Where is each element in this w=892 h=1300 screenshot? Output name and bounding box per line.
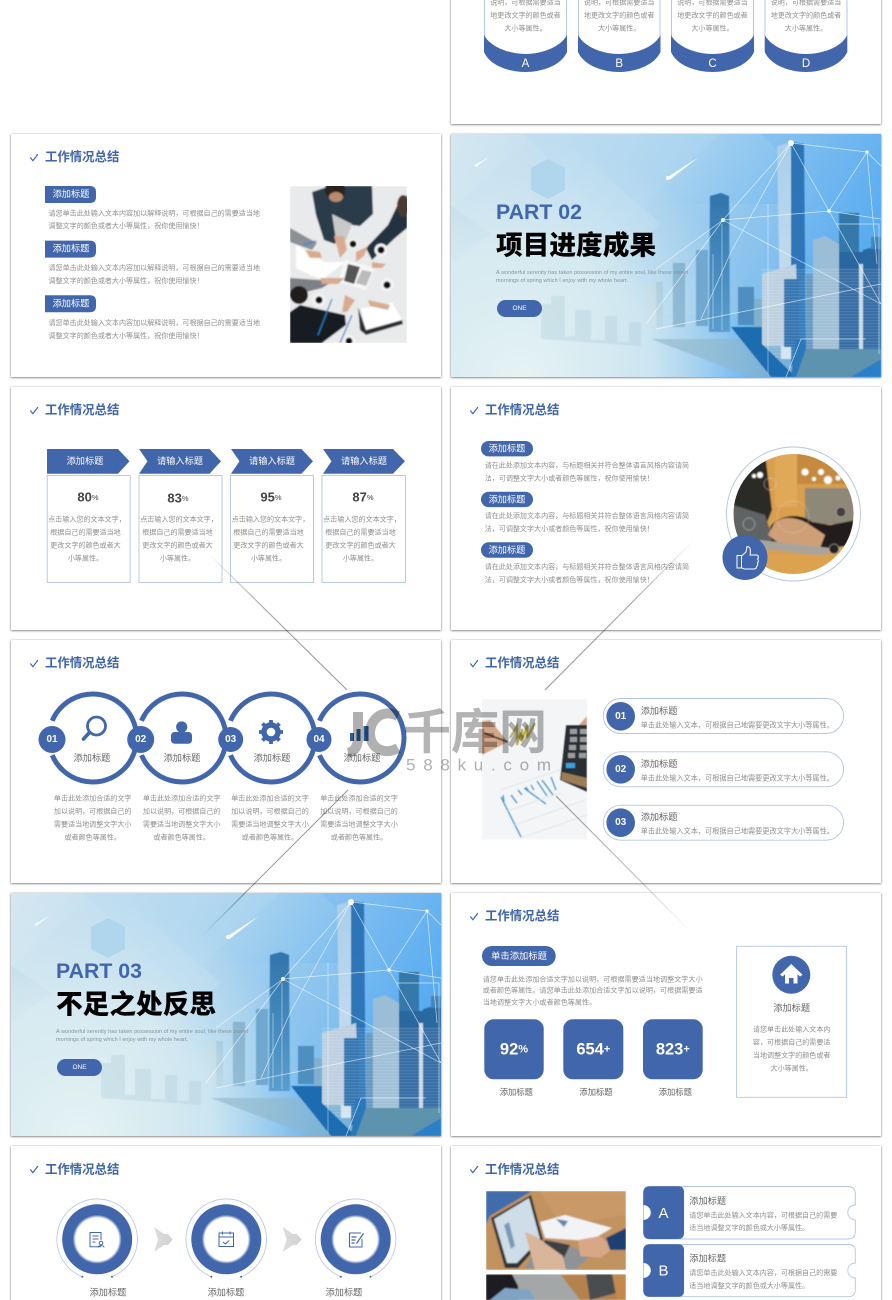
icon: thumbs up badge: [722, 535, 768, 580]
ring 2: 需要适当地调整文字大小: [143, 820, 220, 828]
photo: charts and calculator: [482, 699, 587, 840]
stat card 823+: 添加标题: [659, 1087, 692, 1097]
paragraph 3: 调整文字的颜色或者大小等属性，祝你使用愉快！: [48, 331, 204, 340]
side card: [737, 946, 847, 1097]
stat card 654+: [563, 1019, 623, 1097]
photo: second desk scene: [486, 1274, 626, 1300]
card B: B: [658, 1262, 669, 1280]
pill 3: [481, 542, 533, 558]
ring 3: 或者颜色等属性。: [242, 832, 298, 842]
column 1: [47, 449, 130, 582]
button: ONE: [72, 1064, 87, 1071]
numbered pill 1: 单击此处输入文本，可根据自己地需要更改文字大小等属性。: [641, 720, 834, 729]
pill heading: [482, 946, 556, 966]
column 3: 请输入标题: [249, 455, 295, 466]
subtitle: [496, 270, 688, 284]
pill heading: 单击添加标题: [491, 950, 547, 961]
cylinder B: [578, 0, 660, 72]
subtitle: A wonderful serenity has taken possession of my entire soul, like these sweet: [56, 1029, 248, 1035]
stat card 654+: 添加标题: [579, 1087, 613, 1097]
cylinder C: C: [708, 58, 717, 70]
pill 1: 添加标题: [489, 443, 525, 454]
pill 1: [481, 441, 533, 456]
photo: laptop and papers on wood desk: [486, 1191, 626, 1270]
cylinder A: 地更改文字的颜色或者: [490, 10, 561, 20]
card B: 添加标题: [689, 1253, 726, 1264]
numbered pill 3: 添加标题: [641, 811, 677, 822]
cylinder D: [765, 0, 847, 72]
panel: photo with three numbered pills: [451, 640, 881, 883]
paragraph 1: [485, 460, 689, 482]
stat card 92%: 添加标题: [500, 1087, 533, 1097]
paragraph 2: [485, 511, 689, 533]
step 2: [186, 1199, 267, 1297]
icon: note with pen: [350, 1233, 364, 1247]
panel: three tagged paragraphs with meeting photo: [11, 134, 441, 377]
column 2: 83%: [167, 490, 189, 506]
stat card 92%: [484, 1019, 544, 1097]
icon: calendar: [219, 1232, 234, 1246]
column 2: 点击输入您的文本文字，: [140, 514, 218, 524]
ring 1: 需要适当地调整文字大小: [54, 820, 131, 828]
cylinder B: 地更改文字的颜色或者: [584, 10, 654, 20]
ring 2: 02: [135, 734, 147, 745]
ring 4: 单击此处添加合适的文字: [320, 794, 398, 802]
heading: 工作情况总结: [485, 908, 559, 923]
subtitle: A wonderful serenity has taken possession of my entire soul, like these sweet: [496, 270, 688, 276]
cityscape network image: [11, 883, 441, 1136]
heading: 工作情况总结: [45, 149, 119, 164]
paragraph 1: 调整文字的颜色或者大小等属性，祝你使用愉快！: [48, 221, 204, 230]
icon: gear: [259, 720, 283, 744]
paragraph 3: 法，可调整文字大小或者颜色等属性，祝你使用愉快！: [485, 575, 654, 584]
column 4: 点击输入您的文本文字，: [323, 514, 401, 524]
card A: 添加标题: [689, 1195, 726, 1206]
side card: 请您单击此处输入文本内: [753, 1024, 830, 1034]
cylinder D: 地更改文字的颜色或者: [771, 10, 841, 20]
subtitle: mornings of spring which I enjoy with my whole heart.: [496, 278, 628, 284]
step 3: 添加标题: [326, 1286, 362, 1297]
heading: 工作情况总结: [485, 402, 559, 417]
paragraph: 请您单击此处添加合适文字加以说明，可根据需要适当地调整文字大小: [483, 974, 703, 983]
arrow 2: [283, 1227, 302, 1252]
numbered pill 2: [603, 752, 844, 787]
heading: 工作情况总结: [485, 655, 559, 670]
column 4: 87%: [352, 490, 374, 504]
section title: 项目进度成果: [496, 230, 656, 260]
paragraph 3: [48, 318, 260, 340]
step 1: 添加标题: [90, 1286, 126, 1297]
button: [497, 300, 542, 317]
column 1: 更改文字的颜色或者大: [50, 540, 121, 550]
card A: A: [658, 1205, 669, 1222]
ring 4: 04: [313, 734, 325, 745]
numbered pill 3: [603, 805, 844, 840]
panel: PART 03 cover: [11, 883, 441, 1136]
paragraph 1: 请您单击此处输入文本内容加以解释说明，可根据自己的需要适当地: [48, 208, 260, 218]
photo: business meeting from above: [290, 180, 409, 347]
paragraph 2: [48, 263, 260, 285]
ring 4: 加以说明，可根据自己的: [320, 806, 398, 816]
stat card 823+: 823+: [656, 1041, 690, 1059]
column 2: 请输入标题: [157, 455, 203, 466]
cylinder D: 大小等属性。: [785, 24, 827, 32]
panel: three pills with circular photo: [451, 387, 881, 630]
column 3: 小等属性。: [251, 554, 286, 562]
part number: PART 03: [56, 959, 142, 983]
numbered pill 2: 添加标题: [641, 758, 677, 769]
paragraph 3: 请在此处添加文本内容，与标题相关并符合整体语言风格内容请简: [485, 562, 689, 571]
pill 3: 添加标题: [489, 544, 525, 555]
watermark: site address: 588ku.com: [406, 756, 551, 774]
panel: three donut steps: [11, 1146, 441, 1300]
tag 2: 添加标题: [53, 243, 89, 254]
numbered pill 1: 添加标题: [641, 705, 677, 716]
tag 1: 添加标题: [53, 188, 89, 199]
heading: 工作情况总结: [45, 1161, 119, 1176]
ring 2: 单击此处添加合适的文字: [143, 794, 220, 802]
ring 1: 或者颜色等属性。: [65, 832, 121, 842]
icon: house: [780, 964, 802, 984]
panel: PART 02 cover: [451, 124, 881, 377]
column 4: 根据自己的需要适当地: [325, 528, 396, 536]
tag 3: [45, 295, 96, 312]
cylinder B: 大小等属性。: [598, 24, 640, 32]
heading: 工作情况总结: [45, 655, 119, 670]
panel: four linked rings: [11, 640, 441, 883]
icon: person: [171, 721, 192, 744]
column 1: 小等属性。: [68, 554, 103, 562]
button: [57, 1059, 102, 1076]
ring 1: 加以说明，可根据自己的: [54, 806, 131, 816]
ring 3: 需要适当地调整文字大小: [231, 820, 309, 828]
watermark: logo mark: [348, 712, 398, 753]
panel: cylinders A-D (cropped at top): [451, 0, 881, 124]
ring 4: 添加标题: [344, 752, 380, 763]
ring 3: 添加标题: [254, 752, 290, 763]
column 2: 更改文字的颜色或者大: [142, 540, 213, 550]
part number: PART 02: [496, 200, 582, 224]
paragraph: [483, 974, 703, 1006]
cylinder C: 地更改文字的颜色或者: [677, 10, 748, 20]
numbered pill 2: 单击此处输入文本，可根据自己地需要更改文字大小等属性。: [641, 773, 834, 782]
paragraph 1: 法，可调整文字大小或者颜色等属性，祝你使用愉快！: [485, 474, 654, 482]
stat card 823+: [643, 1019, 703, 1097]
cylinder A: A: [522, 58, 530, 70]
ring 4: 需要适当地调整文字大小: [320, 820, 398, 828]
column 2: 小等属性。: [160, 554, 195, 562]
side card: 当地调整文字的颜色或者: [753, 1050, 830, 1060]
paragraph: 或者颜色等属性。请您单击此处添加合适文字加以说明，可根据需要适: [483, 986, 703, 995]
cylinder A: [484, 0, 567, 72]
side card: 添加标题: [773, 1002, 810, 1013]
paragraph 1: [48, 208, 260, 230]
section title: 不足之处反思: [56, 990, 216, 1020]
tag 1: [45, 186, 96, 203]
ring 4: 或者颜色等属性。: [331, 832, 387, 842]
numbered pill 3: 03: [615, 817, 627, 828]
tag 2: [45, 241, 96, 258]
column 4: 更改文字的颜色或者大: [325, 540, 396, 550]
ring 2: 或者颜色等属性。: [154, 832, 210, 842]
column 1: 根据自己的需要适当地: [50, 528, 121, 536]
watermark: diagonal diamond lines: [203, 540, 694, 935]
paragraph 2: 调整文字的颜色或者大小等属性，祝你使用愉快！: [48, 276, 204, 285]
card A: 适当地调整文字的颜色或大小等属性。: [689, 1223, 809, 1232]
ring 3: 单击此处添加合适的文字: [231, 794, 309, 802]
paragraph 3: 请您单击此处输入文本内容加以解释说明，可根据自己的需要适当地: [48, 318, 260, 327]
stat card 92%: 92%: [500, 1041, 528, 1059]
side card: 大小等属性。: [771, 1064, 813, 1072]
arrow 1: [154, 1227, 173, 1252]
ring 3: 03: [225, 734, 237, 745]
icon: magnifier: [84, 717, 106, 739]
watermark: brand name: 千库网: [403, 706, 547, 760]
column 3: 根据自己的需要适当地: [233, 528, 304, 536]
numbered pill 1: 01: [615, 711, 627, 722]
column 3: [230, 449, 314, 582]
icon: bar chart: [350, 726, 368, 741]
ring 1: [38, 694, 137, 842]
ring 4: [306, 694, 404, 842]
cityscape network image: [451, 124, 881, 377]
card B: 适当地调整文字的颜色或大小等属性。: [689, 1281, 809, 1290]
column 1: 80%: [77, 490, 99, 504]
column 3: 95%: [260, 490, 282, 504]
column 1: 添加标题: [67, 455, 103, 466]
column 2: 根据自己的需要适当地: [142, 528, 213, 536]
tag 3: 添加标题: [53, 297, 89, 308]
panel: four arrow columns with percentages: [11, 387, 441, 630]
cylinder A: 大小等属性。: [504, 24, 547, 32]
ring 1: 01: [46, 734, 58, 745]
button: ONE: [512, 305, 527, 312]
panel: photos with puzzle cards: [451, 1146, 881, 1300]
cylinder C: [671, 0, 754, 72]
column 2: [139, 449, 222, 582]
panel: stats and side card: [451, 893, 881, 1136]
column 4: 小等属性。: [343, 554, 378, 562]
card A: [643, 1186, 855, 1239]
numbered pill 3: 单击此处输入文本，可根据自己地需要更改文字大小等属性。: [641, 826, 834, 835]
stat card 654+: 654+: [576, 1041, 610, 1059]
step 1: [57, 1199, 137, 1297]
ring 2: 加以说明，可根据自己的: [143, 806, 220, 816]
column 4: 请输入标题: [341, 455, 387, 466]
subtitle: mornings of spring which I enjoy with my whole heart.: [56, 1037, 188, 1043]
paragraph 3: [485, 562, 689, 584]
ring 2: [127, 694, 226, 842]
pill 2: 添加标题: [489, 493, 525, 504]
paragraph 2: 请您单击此处输入文本内容加以解释说明，可根据自己的需要适当地: [48, 263, 260, 272]
column 1: 点击输入您的文本文字，: [48, 514, 126, 524]
cylinder B: B: [615, 58, 623, 70]
ring 2: 添加标题: [164, 752, 200, 763]
step 3: [315, 1199, 396, 1297]
cylinder C: 大小等属性。: [691, 24, 734, 32]
card A: 请您单击此处输入文本内容，可根据自己的需要: [689, 1210, 837, 1220]
numbered pill 1: [603, 698, 844, 734]
ring 1: 单击此处添加合适的文字: [54, 794, 131, 802]
column 3: 点击输入您的文本文字，: [232, 514, 309, 524]
ring 1: 添加标题: [74, 752, 110, 763]
icon: document with person: [90, 1232, 104, 1248]
card B: [643, 1244, 855, 1297]
step 2: 添加标题: [208, 1286, 244, 1297]
card B: 请您单击此处输入文本内容，可根据自己的需要: [689, 1268, 837, 1277]
ring 3: [218, 694, 315, 842]
paragraph 1: 请在此处添加文本内容，与标题相关并符合整体语言风格内容请简: [485, 460, 689, 470]
side card: 容，可根据自己的需要适: [753, 1038, 830, 1046]
numbered pill 2: 02: [615, 764, 627, 775]
heading: 工作情况总结: [45, 402, 119, 417]
heading: 工作情况总结: [485, 1161, 559, 1176]
paragraph: 当地调整文字大小或者颜色等属性。: [483, 997, 596, 1006]
photo: hands on laptop: [734, 454, 854, 574]
pill 2: [481, 492, 533, 507]
subtitle: [56, 1029, 248, 1043]
paragraph 2: 请在此处添加文本内容，与标题相关并符合整体语言风格内容请简: [485, 511, 689, 520]
thin ring: [726, 447, 860, 581]
cylinder D: D: [802, 58, 810, 70]
column 4: [322, 449, 406, 582]
column 3: 更改文字的颜色或者大: [233, 540, 304, 550]
ring 3: 加以说明，可根据自己的: [231, 806, 309, 816]
paragraph 2: 法，可调整文字大小或者颜色等属性，祝你使用愉快！: [485, 524, 654, 533]
